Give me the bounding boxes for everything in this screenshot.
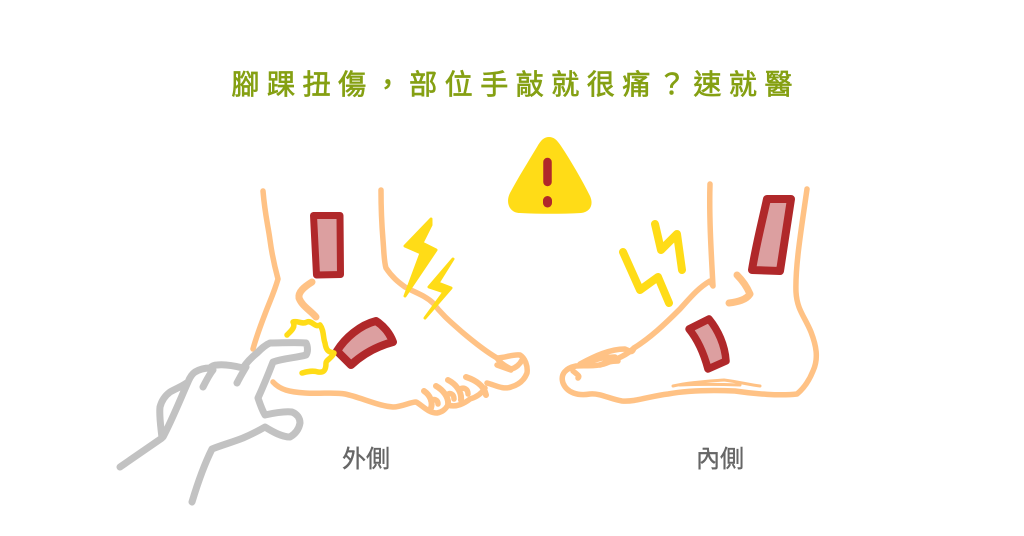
hand pressing [120, 343, 308, 502]
bruise: ankle ligament [337, 321, 393, 365]
bruise: heel ligament [689, 319, 726, 369]
foot outline: inner side [562, 184, 816, 401]
illustration: outer foot [120, 190, 527, 502]
icon: warning triangle [508, 137, 592, 214]
icon: lightning bolts [405, 219, 453, 318]
bruise: upper ligament [314, 216, 340, 275]
pain burst [287, 322, 334, 373]
illustration: inner foot [562, 184, 816, 474]
label: outer: 外側 [342, 439, 390, 474]
icon: lightning bolts [623, 224, 682, 303]
title: 腳踝扭傷，部位手敲就很痛？速就醫 [232, 63, 800, 103]
label: inner: 內側 [696, 439, 744, 474]
bruise: upper ligament [752, 199, 791, 271]
foot outline: outer side [253, 190, 527, 413]
